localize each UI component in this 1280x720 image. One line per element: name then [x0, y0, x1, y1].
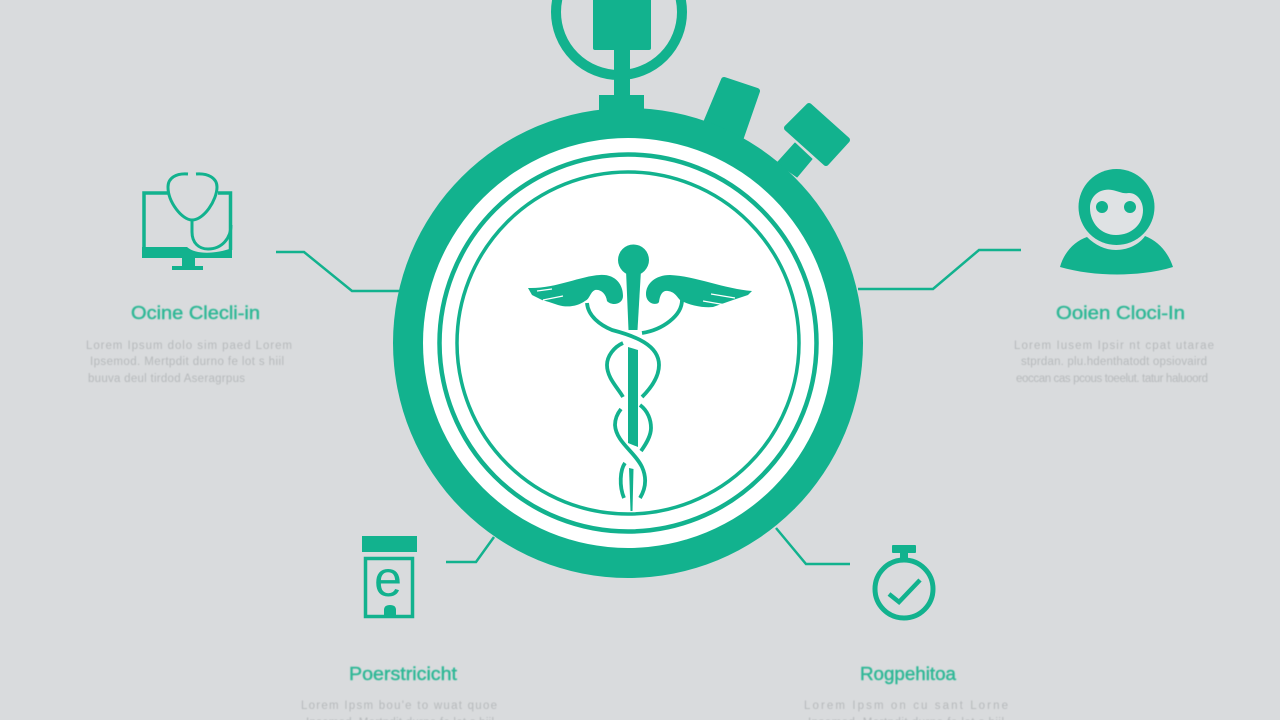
left wing: [528, 275, 623, 306]
connector: bottom left: [446, 537, 494, 562]
panel: bottom left step: [301, 536, 497, 720]
central stopwatch: [393, 0, 863, 578]
stopwatch cap: [892, 545, 916, 561]
heading: bottom left: Poerstricicht: [349, 664, 457, 684]
body text: top right: eoccan cas pcous toeelut. tatur haluoord: [1016, 373, 1208, 385]
stopwatch outer ring: [393, 108, 863, 578]
body text: bottom right: [804, 700, 1008, 720]
outer thin ring: [440, 154, 816, 532]
heading: top left: Ocine Clecli-in: [131, 303, 260, 323]
icon: person: [1060, 169, 1173, 274]
body text: bottom left: Lorem Ipsm bou'e to wuat quoe: [301, 700, 497, 712]
stethoscope: [168, 174, 231, 249]
body text: top right: stprdan. plu.hdenthatodt opsiovaird: [1021, 356, 1207, 368]
check mark: [889, 580, 920, 602]
stopwatch white face: [423, 138, 833, 548]
icon: monitor with stethoscope: [142, 174, 232, 270]
panel: top left step: [86, 174, 292, 385]
serpents: [587, 300, 682, 498]
icon: medicine bottle: [362, 536, 417, 616]
bottle cap: [362, 536, 417, 552]
caduceus staff: [618, 244, 649, 511]
panel: bottom right step: [804, 545, 1008, 720]
body text: top left: buuva deul tirdod Aseragrpus: [88, 373, 245, 385]
body text: bottom left: [301, 700, 497, 720]
stopwatch side button: [706, 80, 757, 140]
stopwatch angled button: [777, 106, 847, 177]
person head: [1078, 169, 1154, 245]
panel: top right step: [1014, 169, 1214, 385]
bottle body: [366, 558, 412, 616]
heading: bottom right: Rogpehitoa: [860, 664, 957, 684]
bottle label letter: e: [374, 551, 402, 607]
connector: top left: [276, 252, 400, 291]
stopwatch top loop: [556, 0, 682, 115]
monitor frame: [142, 193, 232, 270]
body text: top right: Lorem Iusem Ipsir nt cpat utarae: [1014, 340, 1214, 352]
person shoulders: [1060, 236, 1173, 274]
connector: bottom right: [776, 528, 850, 564]
body text: top right: [1014, 340, 1214, 385]
person face: [1090, 190, 1143, 235]
icon: caduceus: [528, 244, 752, 511]
right wing: [646, 275, 752, 307]
body text: top left: Ipsemod. Mertpdit durno fe lot s hiil: [90, 356, 284, 368]
body text: top left: Lorem Ipsum dolo sim paed Lorem: [86, 340, 292, 352]
heading: top right: Ooien Cloci-In: [1056, 303, 1185, 323]
person eyes: [1096, 201, 1136, 213]
bottle bump: [384, 605, 396, 616]
inner thin ring: [457, 172, 799, 514]
body text: bottom right: Lorem Ipsm on cu sant Lorne: [804, 700, 1008, 712]
stopwatch dial: [875, 560, 933, 618]
icon: stopwatch with check: [875, 545, 933, 618]
connector: top right: [858, 250, 1021, 289]
body text: top left: [86, 340, 292, 385]
